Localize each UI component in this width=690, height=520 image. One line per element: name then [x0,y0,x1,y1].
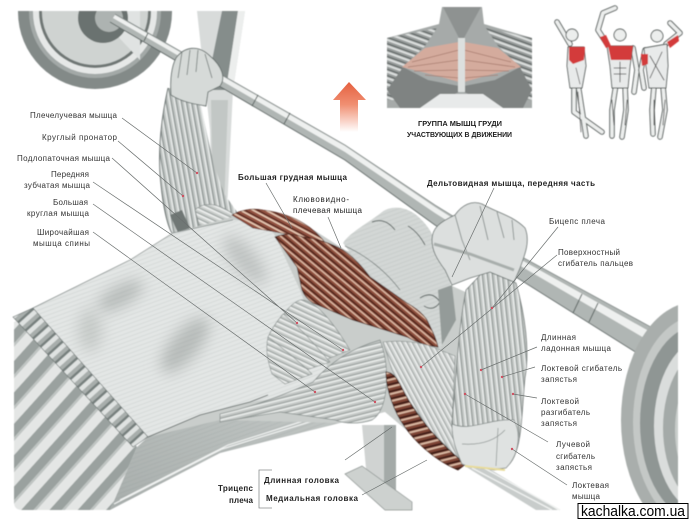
labels: left column: Плечелучевая мышца [30,111,118,120]
labels: right column [541,217,633,501]
labels: chest and shoulder: плечевая мышца [293,206,363,215]
body silhouette and torso [33,217,472,465]
triceps long head in red [386,372,466,470]
labels: right column: Поверхностный [558,248,620,257]
deltoid and biceps region [383,341,462,462]
labels: triceps heads with bracket: Длинная головка [264,476,340,485]
labels: right column: ладонная мышца [541,344,612,353]
labels: chest and shoulder: Клювовидно- [293,195,349,204]
right hand gripping bar [432,203,527,285]
labels: right column: Локтевой сгибатель [541,364,622,373]
right weight plate [620,304,679,503]
serratus muscle fingers [267,300,350,384]
muscle marker dots [182,172,514,450]
labels: left column: зубчатая мышца [24,181,91,190]
left forearm [160,88,240,233]
labels: right column: сгибатель [556,452,595,461]
right pectoral [464,42,521,82]
labels: right column: Локтевая [572,481,609,490]
figure 2: front view, arm raised [598,8,637,137]
arrow: upward movement [333,82,366,132]
labels: triceps heads with bracket: плеча [229,496,254,505]
labels: right column: Лучевой [556,440,590,449]
barbell [110,14,660,358]
three small muscle figures [557,8,680,137]
labels: right column: Бицепс плеча [549,217,606,226]
labels: left column [17,111,118,248]
left pectoral [402,42,459,82]
bench support post [345,425,560,510]
trousers waistband [13,308,148,447]
labels: right column: Длинная [541,333,576,342]
labels: right column: запястья [541,419,577,428]
labels: chest and shoulder: Большая грудная мышца [238,173,348,182]
figure 1: side view [557,22,602,136]
labels: left column: Широчайшая [37,228,89,237]
left weight plate [18,0,172,89]
chest group caption [407,119,512,139]
rack upright post [197,11,245,210]
labels: left column: Подлопаточная мышца [17,154,111,163]
labels: left column: Передняя [51,170,89,179]
labels: left column: Большая [53,198,88,207]
labels: triceps heads with bracket [218,470,359,508]
right forearm [452,270,527,470]
labels: right column: разгибатель [541,408,590,417]
labels: right column: мышца [572,492,601,501]
trousers [13,308,148,510]
figure 3: back view [641,23,680,137]
chest muscle group illustration [387,7,532,108]
chest group caption: ГРУППА МЫШЦ ГРУДИ [418,119,502,128]
bench pad [110,395,340,510]
triceps / upper arm in grey [220,340,387,423]
left hand gripping bar [171,48,223,106]
labels: triceps heads with bracket: Трицепс [218,484,254,493]
upper pectoral head [232,209,327,245]
leader lines [93,118,567,495]
main pectoralis muscle [275,234,438,347]
labels: left column: круглая мышца [27,209,90,218]
chest group caption: УЧАСТВУЮЩИХ В ДВИЖЕНИИ [407,130,512,139]
labels: triceps heads with bracket: Медиальная головка [266,494,359,503]
labels: right column: запястья [541,375,577,384]
labels: left column: Круглый пронатор [42,133,118,142]
labels: chest and shoulder [238,173,595,215]
labels: right column: Локтевой [541,397,579,406]
head [343,208,456,350]
labels: right column: сгибатель пальцев [558,259,633,268]
labels: right column: запястья [556,463,592,472]
labels: left column: мышца спины [33,239,90,248]
labels: chest and shoulder: Дельтовидная мышца, передняя часть [427,179,595,188]
